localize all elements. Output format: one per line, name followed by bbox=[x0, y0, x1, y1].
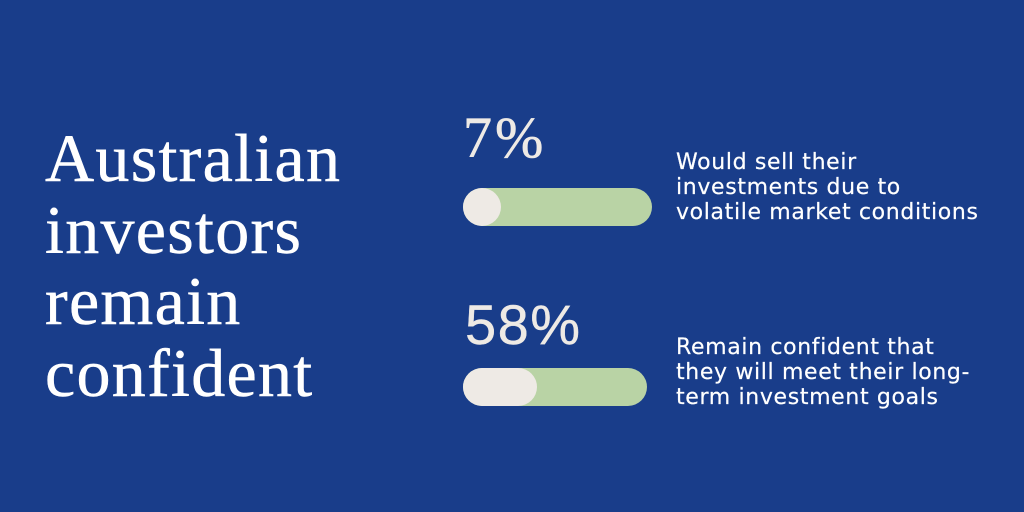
description: sell investments bbox=[676, 150, 979, 225]
title: Australian bbox=[45, 120, 341, 196]
stat: 58%: 58% bbox=[465, 293, 582, 356]
description: sell investments: volatile market conditions bbox=[676, 200, 979, 225]
progress bar: 58% bbox=[463, 368, 647, 406]
description: remain confident: term investment goals bbox=[676, 385, 939, 410]
stat: 7%: 7% bbox=[463, 105, 546, 170]
description: remain confident: they will meet their long- bbox=[676, 360, 970, 385]
progress fill: 58% bbox=[463, 368, 537, 406]
progress fill: 7% bbox=[463, 188, 501, 226]
title: investors bbox=[45, 192, 302, 268]
title bbox=[45, 120, 341, 410]
description: remain confident: Remain confident that bbox=[676, 335, 935, 360]
title: remain bbox=[45, 263, 242, 339]
title: confident bbox=[45, 334, 314, 410]
description: remain confident bbox=[676, 335, 970, 410]
progress bar: 7% bbox=[463, 188, 652, 226]
description: sell investments: investments due to bbox=[676, 175, 901, 200]
description: sell investments: Would sell their bbox=[676, 150, 857, 175]
